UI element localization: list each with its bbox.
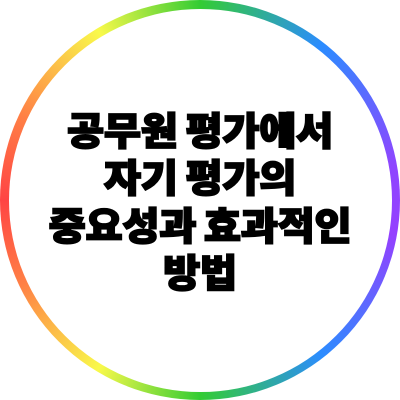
title: 자기 평가의 [104, 158, 296, 201]
title [49, 111, 351, 296]
title: 공무원 평가에서 [67, 111, 333, 154]
title: 방법 [163, 253, 237, 296]
title: 중요성과 효과적인 [49, 206, 351, 249]
